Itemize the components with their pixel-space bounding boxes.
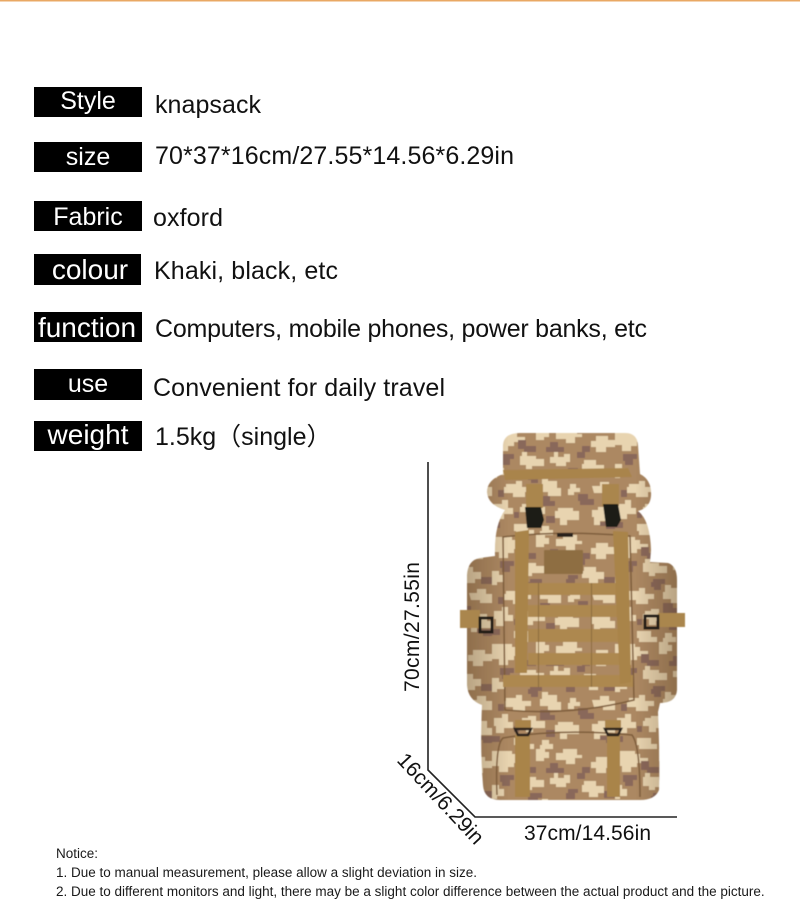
spec row: colour [34, 254, 338, 285]
spec row: use: Convenient for daily travel [153, 374, 445, 402]
lower buckles [515, 729, 621, 735]
dimension label: height: 70cm/27.55in [401, 562, 424, 692]
spec row: style: Style [60, 87, 116, 115]
zip pull [557, 533, 573, 537]
spec row: fabric: Fabric [53, 203, 123, 231]
spec row: size [34, 142, 514, 172]
spec row: colour: Khaki, black, etc [154, 257, 338, 285]
spec row: colour: colour [52, 254, 128, 285]
spec row: size: size [66, 143, 110, 171]
spec row: weight: weight [47, 419, 129, 450]
notice: 1. Due to manual measurement, please allow a slight deviation in size. [56, 865, 477, 880]
spec row: style [34, 87, 262, 119]
spec row: function: Computers, mobile phones, power banks, etc [155, 315, 647, 343]
side buckles [480, 616, 658, 632]
bottom pocket [497, 732, 640, 797]
spec row: size: 70*37*16cm/27.55*14.56*6.29in [155, 142, 514, 170]
spec row: fabric [34, 201, 223, 232]
spec row: function: function [38, 312, 136, 343]
dimension axis lines [428, 462, 677, 817]
bag edge shading [466, 478, 678, 800]
lid trim [503, 468, 632, 480]
spec row: weight: 1.5kg（single） [155, 423, 331, 451]
spec row: use: use [68, 370, 108, 398]
molle webbing [503, 583, 633, 687]
dimension label: depth: 16cm/6.29in [392, 749, 488, 849]
dimension label: width: 37cm/14.56in [524, 822, 651, 845]
spec row: weight [34, 419, 331, 451]
vertical straps [515, 530, 631, 684]
top accent line [0, 0, 800, 2]
top buckles [525, 504, 621, 528]
front panel outline [503, 533, 634, 712]
notice: Notice: [56, 846, 98, 861]
roll top straps [526, 484, 619, 508]
spec row: use [34, 369, 445, 402]
notice [56, 846, 765, 899]
webbing stitches [538, 583, 592, 687]
bag silhouette [467, 433, 677, 800]
spec row: style: knapsack [155, 91, 262, 119]
notice: 2. Due to different monitors and light, there may be a slight color difference between the actual product and the picture. [56, 884, 765, 899]
side straps [460, 610, 685, 628]
backpack illustration [460, 433, 685, 800]
velcro patch [544, 550, 583, 574]
lower straps [515, 720, 621, 797]
spec row: fabric: oxford [153, 204, 223, 232]
